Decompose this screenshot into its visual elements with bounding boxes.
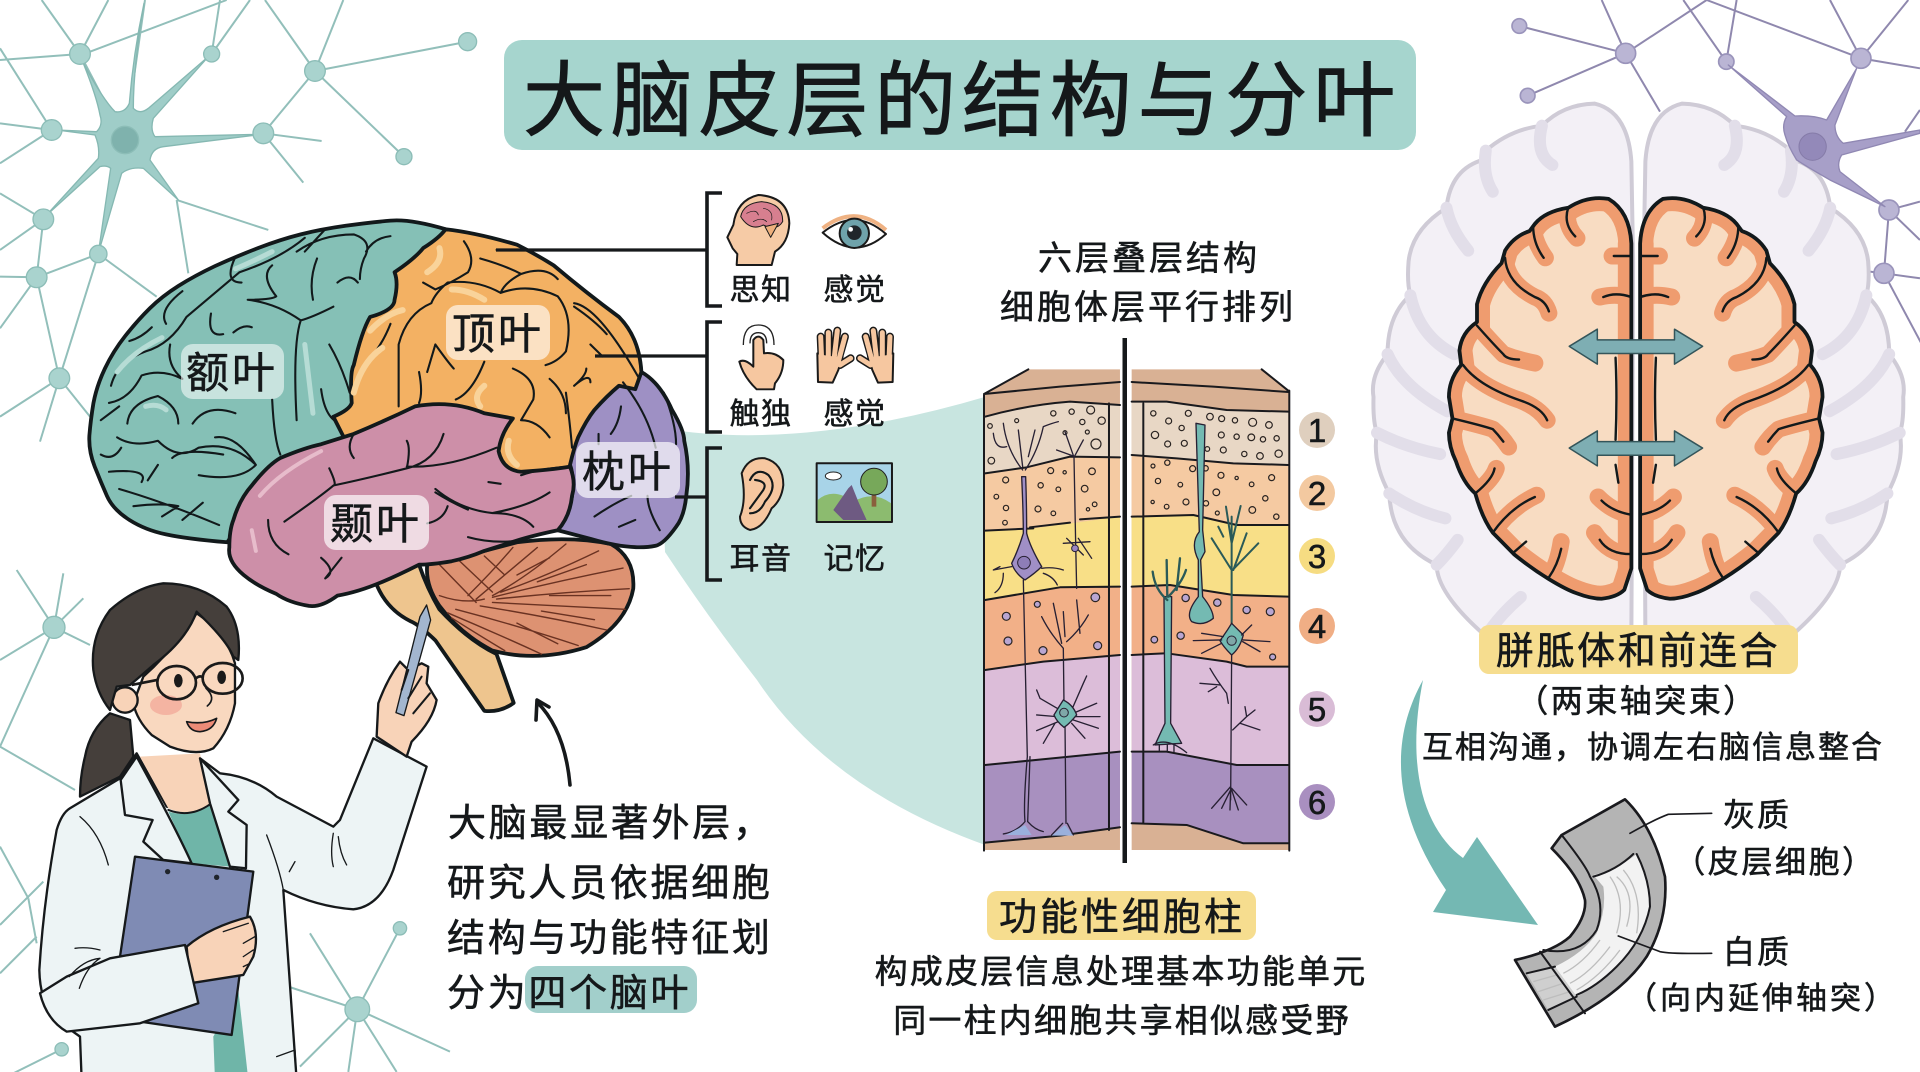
hand holding clipboard bbox=[187, 917, 256, 983]
explanatory text: 研究人员依据细胞 bbox=[447, 863, 773, 905]
left hemisphere section bbox=[1449, 198, 1631, 599]
blush bbox=[150, 695, 182, 715]
double arrow: anterior commissure bbox=[1569, 431, 1703, 466]
cortical column diagram bbox=[984, 369, 1290, 851]
column base layers left bbox=[984, 369, 1120, 851]
layer numbers 1-6: 4 bbox=[1308, 608, 1326, 645]
background neuron network: lower left bbox=[0, 570, 450, 1072]
callout: corpus callosum text: （两束轴突束） bbox=[1516, 683, 1758, 719]
outer pale brain: left bbox=[1373, 104, 1633, 640]
lobe label: frontal: 额叶 bbox=[186, 350, 278, 398]
layer numbers 1-6: 2 bbox=[1308, 475, 1326, 512]
left lapel bbox=[121, 757, 192, 863]
icon: eye bbox=[823, 216, 886, 248]
functional column caption: 同一柱内细胞共享相似感受野 bbox=[893, 1002, 1351, 1039]
parietal lobe bbox=[333, 229, 648, 479]
clipboard bbox=[120, 857, 253, 1035]
label: sensation 2: 感觉 bbox=[824, 398, 886, 431]
lobe label: parietal: 顶叶 bbox=[452, 311, 544, 359]
occipital lobe bbox=[558, 372, 688, 547]
explanatory text: 大脑最显著外层， bbox=[448, 803, 774, 845]
face bbox=[133, 613, 235, 752]
functional column caption: 构成皮层信息处理基本功能单元 bbox=[875, 953, 1367, 990]
pyramidal neuron: large left bbox=[993, 422, 1063, 835]
heading: six-layer structure bbox=[1000, 240, 1296, 327]
label: cognition: 思知 bbox=[730, 274, 792, 307]
callout: corpus callosum text: 胼胝体和前连合 bbox=[1496, 631, 1780, 673]
label: gray matter: 灰质 bbox=[1723, 797, 1791, 833]
teal bipolar neuron: right centre bbox=[1189, 423, 1213, 624]
label: memory: 记忆 bbox=[824, 543, 886, 576]
brain stem bbox=[376, 565, 514, 711]
column base layers right bbox=[1132, 369, 1290, 851]
heading: six-layer structure: 六层叠层结构 bbox=[1038, 240, 1260, 278]
background neuron network: top right bbox=[1512, 0, 1920, 353]
label: sensation 1: 感觉 bbox=[824, 274, 886, 307]
layer numbers 1-6: 1 bbox=[1308, 412, 1326, 449]
outer pale brain: right bbox=[1644, 104, 1904, 640]
neck bbox=[140, 753, 211, 812]
layer numbers 1-6 bbox=[1299, 412, 1335, 821]
label: white matter: （向内延伸轴突） bbox=[1626, 981, 1898, 1016]
layer numbers 1-6: 3 bbox=[1308, 538, 1326, 575]
mouth bbox=[187, 718, 217, 732]
arrow: curved teal down to tissue sample bbox=[1401, 680, 1538, 925]
callout: corpus callosum text: 互相沟通，协调左右脑信息整合 bbox=[1422, 730, 1884, 765]
icon: ear bbox=[740, 458, 783, 530]
brain lateral view with four lobes bbox=[89, 220, 688, 711]
cerebellum bbox=[427, 539, 633, 656]
label: white matter: 白质 bbox=[1723, 934, 1791, 970]
label: gray matter bbox=[1674, 797, 1876, 880]
label: hearing: 耳音 bbox=[730, 543, 792, 576]
function brackets bbox=[707, 193, 722, 580]
label line: gray matter bbox=[1630, 813, 1712, 833]
eyes bbox=[174, 671, 226, 687]
icon: touch finger bbox=[739, 325, 783, 389]
icon: hands bbox=[817, 331, 893, 383]
label: gray matter: （皮层细胞） bbox=[1674, 845, 1876, 880]
pen bbox=[396, 605, 431, 716]
connector lines from brain to function groups bbox=[496, 250, 707, 497]
teal neuron: left lower bbox=[1037, 600, 1100, 836]
tissue sample: gray and white matter bbox=[1515, 799, 1712, 1027]
lobe label: temporal: 颞叶 bbox=[330, 501, 422, 549]
lobe label: occipital: 枕叶 bbox=[582, 449, 674, 497]
callout: corpus callosum text bbox=[1422, 625, 1884, 765]
background neuron network: top left bbox=[0, 0, 477, 442]
teal shirt bbox=[168, 805, 248, 1072]
explanatory text: 结构与功能特征划 bbox=[447, 918, 773, 960]
teal pyramidal cell: right lower bbox=[1153, 558, 1187, 753]
icon: landscape picture bbox=[817, 463, 892, 522]
lower sleeve bbox=[40, 945, 198, 1032]
purple neuron soma over brain bbox=[1728, 65, 1920, 207]
central vertical divider line bbox=[1122, 338, 1127, 863]
lab coat bbox=[39, 738, 427, 1072]
scientist character bbox=[39, 583, 437, 1072]
layer numbers 1-6: 5 bbox=[1308, 691, 1326, 728]
right lapel bbox=[200, 758, 247, 868]
pyramidal neuron: small upper bbox=[1057, 432, 1092, 588]
ponytail bbox=[80, 713, 133, 797]
frontal lobe bbox=[89, 220, 446, 542]
ear bbox=[112, 687, 138, 713]
function icons and labels bbox=[727, 195, 893, 576]
right hemisphere section bbox=[1640, 198, 1823, 599]
top-view brain with corpus callosum bbox=[1373, 104, 1904, 640]
arrow: curved black to brain bbox=[536, 700, 570, 785]
functional column caption: 功能性细胞柱 bbox=[999, 897, 1245, 939]
pyramidal neuron: right tall bbox=[1193, 506, 1270, 810]
double arrow: corpus callosum bbox=[1569, 329, 1703, 364]
raised hand bbox=[377, 662, 437, 757]
glasses bbox=[132, 663, 243, 699]
functional column caption bbox=[875, 891, 1367, 1039]
highlight: four lobes bbox=[525, 966, 697, 1013]
cell body dots bbox=[988, 406, 1282, 660]
label line: white matter bbox=[1618, 936, 1712, 953]
label: touch: 触独 bbox=[730, 398, 792, 431]
label: white matter bbox=[1626, 934, 1898, 1016]
heading: six-layer structure: 细胞体层平行排列 bbox=[1000, 289, 1296, 327]
explanatory text: 分为四个脑叶 bbox=[447, 973, 691, 1015]
hair bbox=[93, 583, 239, 710]
explanatory text bbox=[447, 803, 774, 1015]
zoom wedge from occipital lobe to cortical column bbox=[660, 396, 988, 846]
nose bbox=[206, 688, 212, 706]
title: 大脑皮层的结构与分叶 bbox=[523, 56, 1401, 147]
icon: head with brain bbox=[727, 195, 789, 265]
temporal lobe bbox=[229, 404, 574, 606]
layer numbers 1-6: 6 bbox=[1308, 784, 1326, 821]
